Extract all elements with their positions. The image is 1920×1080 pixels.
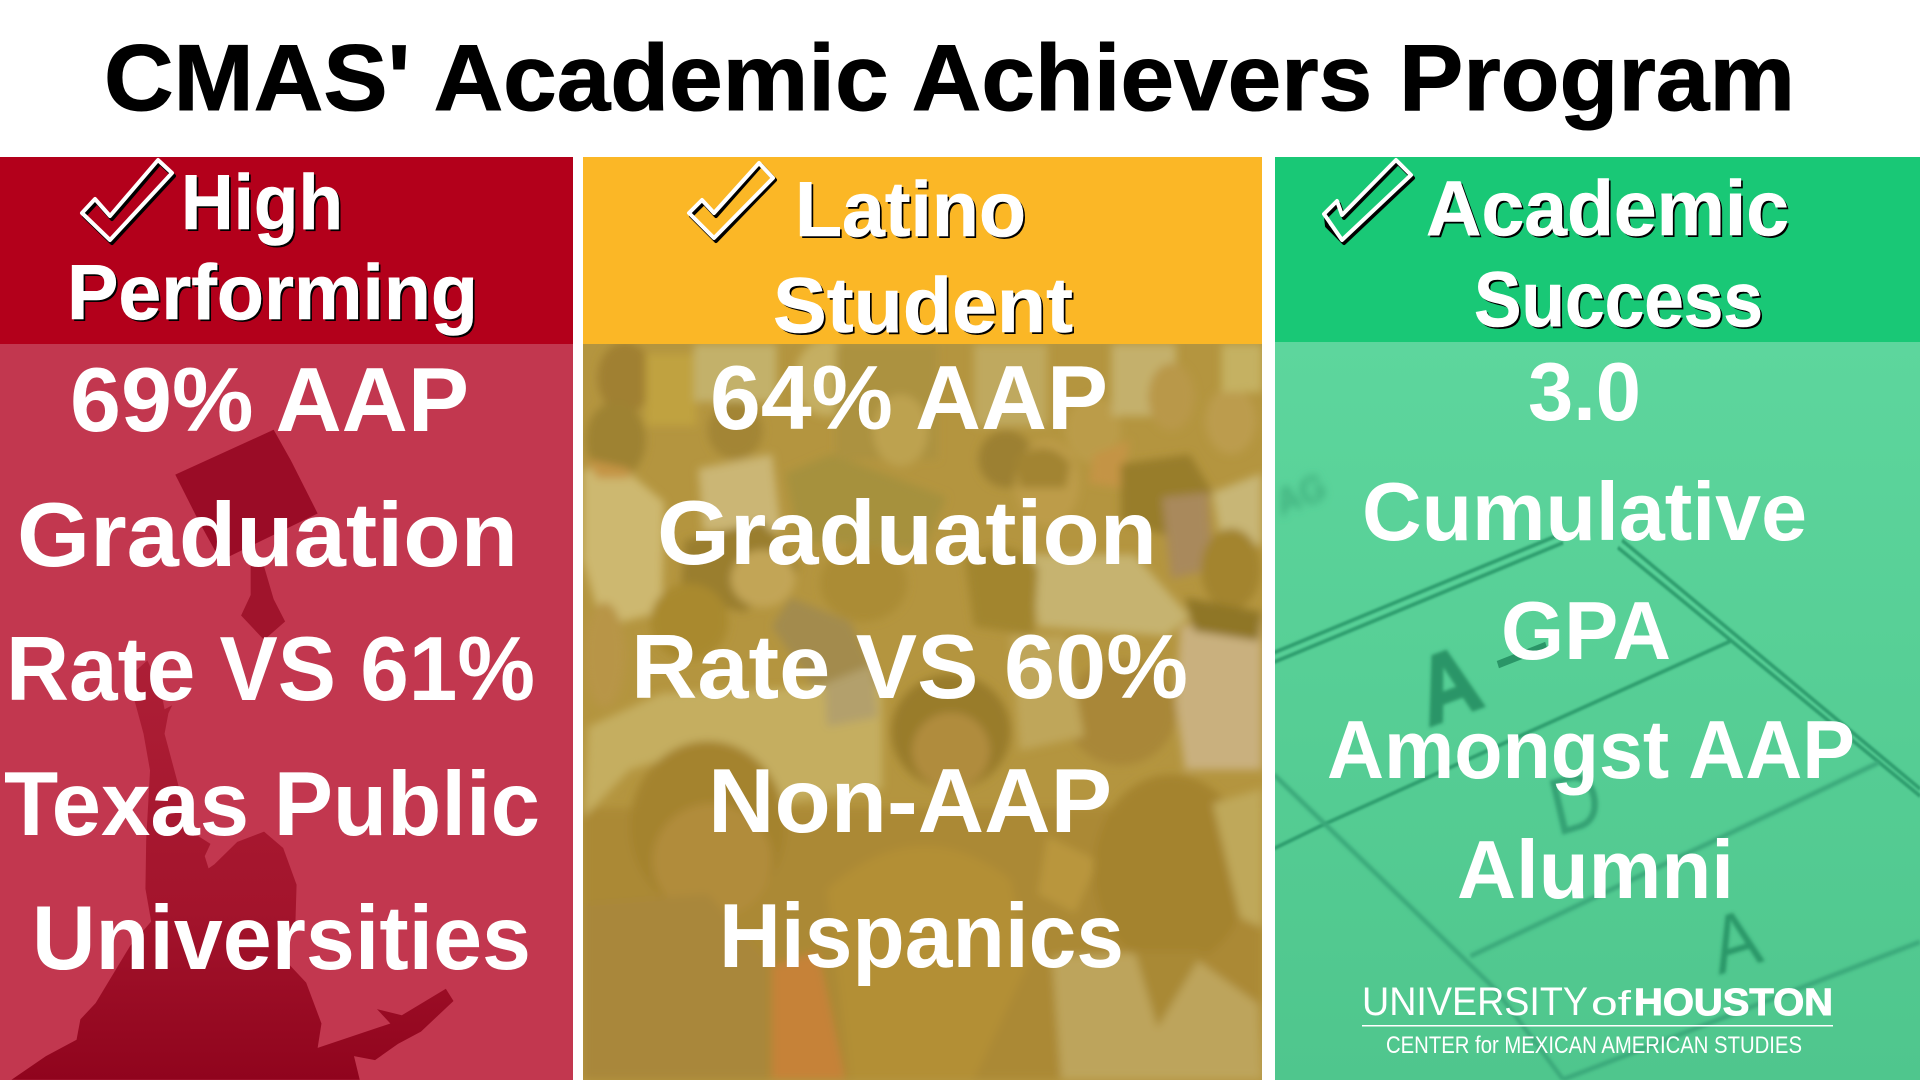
- text: graduation rate comparison: Texas Public: [4, 754, 540, 855]
- heading: academic success: Success: [1474, 255, 1763, 343]
- panel: latino student: [583, 157, 1262, 1080]
- heading: academic success: Academic: [1426, 164, 1789, 252]
- text: gpa statistic: 3.0: [1528, 345, 1641, 438]
- text: graduation rate comparison: Hispanics: [719, 886, 1124, 987]
- heading: high performing: High: [183, 160, 345, 248]
- text: gpa statistic: GPA: [1501, 584, 1671, 677]
- text: graduation rate comparison: Graduation: [17, 485, 518, 586]
- title: CMAS' Academic Achievers Program: [104, 25, 1795, 130]
- panel body background: graduate silhouette photo: [0, 344, 573, 1080]
- icon: check mark: [82, 160, 174, 243]
- text: gpa statistic: Cumulative: [1362, 465, 1807, 558]
- text: graduation rate comparison: Non-AAP: [708, 751, 1112, 852]
- logo: university of houston center for mexican american studies: of: [1591, 985, 1632, 1023]
- panel body background: grade sheet photo: [1271, 342, 1920, 1080]
- header: green band: [1275, 157, 1920, 342]
- text: graduation rate comparison: [4, 350, 540, 989]
- heading: latino student: Latino: [797, 167, 1028, 255]
- text: graduation rate comparison: Universities: [32, 888, 531, 989]
- graduate silhouette: [11, 430, 453, 1080]
- panel body background: grade sheet photo: A: [1702, 892, 1769, 993]
- heading: latino student: Student: [773, 261, 1073, 349]
- logo: university of houston center for mexican american studies: HOUSTON: [1634, 982, 1833, 1024]
- heading: high performing: High: [181, 158, 343, 246]
- heading: academic success: [1426, 164, 1791, 345]
- text: graduation rate comparison: Rate VS 61%: [6, 619, 535, 720]
- heading: high performing: [67, 158, 480, 338]
- panel: academic success: [1271, 157, 1920, 1080]
- heading: academic success: Academic: [1428, 166, 1791, 254]
- icon: check mark: [689, 163, 775, 241]
- text: gpa statistic: [1327, 345, 1855, 916]
- logo: university of houston center for mexican american studies: UNIVERSITY: [1362, 980, 1588, 1024]
- heading: academic success: Success: [1476, 257, 1765, 345]
- panel body background: crowd photo: [583, 340, 1262, 1080]
- text: graduation rate comparison: 64% AAP: [710, 348, 1108, 449]
- text: gpa statistic: Alumni: [1457, 823, 1734, 916]
- logo: university of houston center for mexican american studies: CENTER for MEXICAN AMERICAN STUDIES: [1386, 1032, 1802, 1059]
- text: graduation rate comparison: Graduation: [657, 483, 1157, 584]
- heading: latino student: Latino: [795, 165, 1026, 253]
- heading: high performing: Performing: [69, 250, 480, 338]
- photo lettering: A: [1405, 624, 1492, 747]
- heading: latino student: [773, 165, 1075, 351]
- panel body background: grade sheet photo: AG: [1271, 464, 1331, 524]
- text: graduation rate comparison: 69% AAP: [70, 350, 469, 451]
- logo: university of houston center for mexican american studies: [1362, 980, 1833, 1059]
- heading: high performing: Performing: [67, 248, 478, 336]
- header: yellow band: [583, 157, 1262, 344]
- icon: check mark: [1324, 160, 1413, 243]
- text: gpa statistic: Amongst AAP: [1327, 703, 1855, 796]
- text: graduation rate comparison: [631, 348, 1188, 987]
- text: graduation rate comparison: Rate VS 60%: [631, 617, 1188, 718]
- heading: latino student: Student: [775, 263, 1075, 351]
- panel body background: grade sheet photo: D: [1540, 752, 1611, 854]
- panel: high performing: [0, 157, 573, 1080]
- header: red band: [0, 157, 573, 344]
